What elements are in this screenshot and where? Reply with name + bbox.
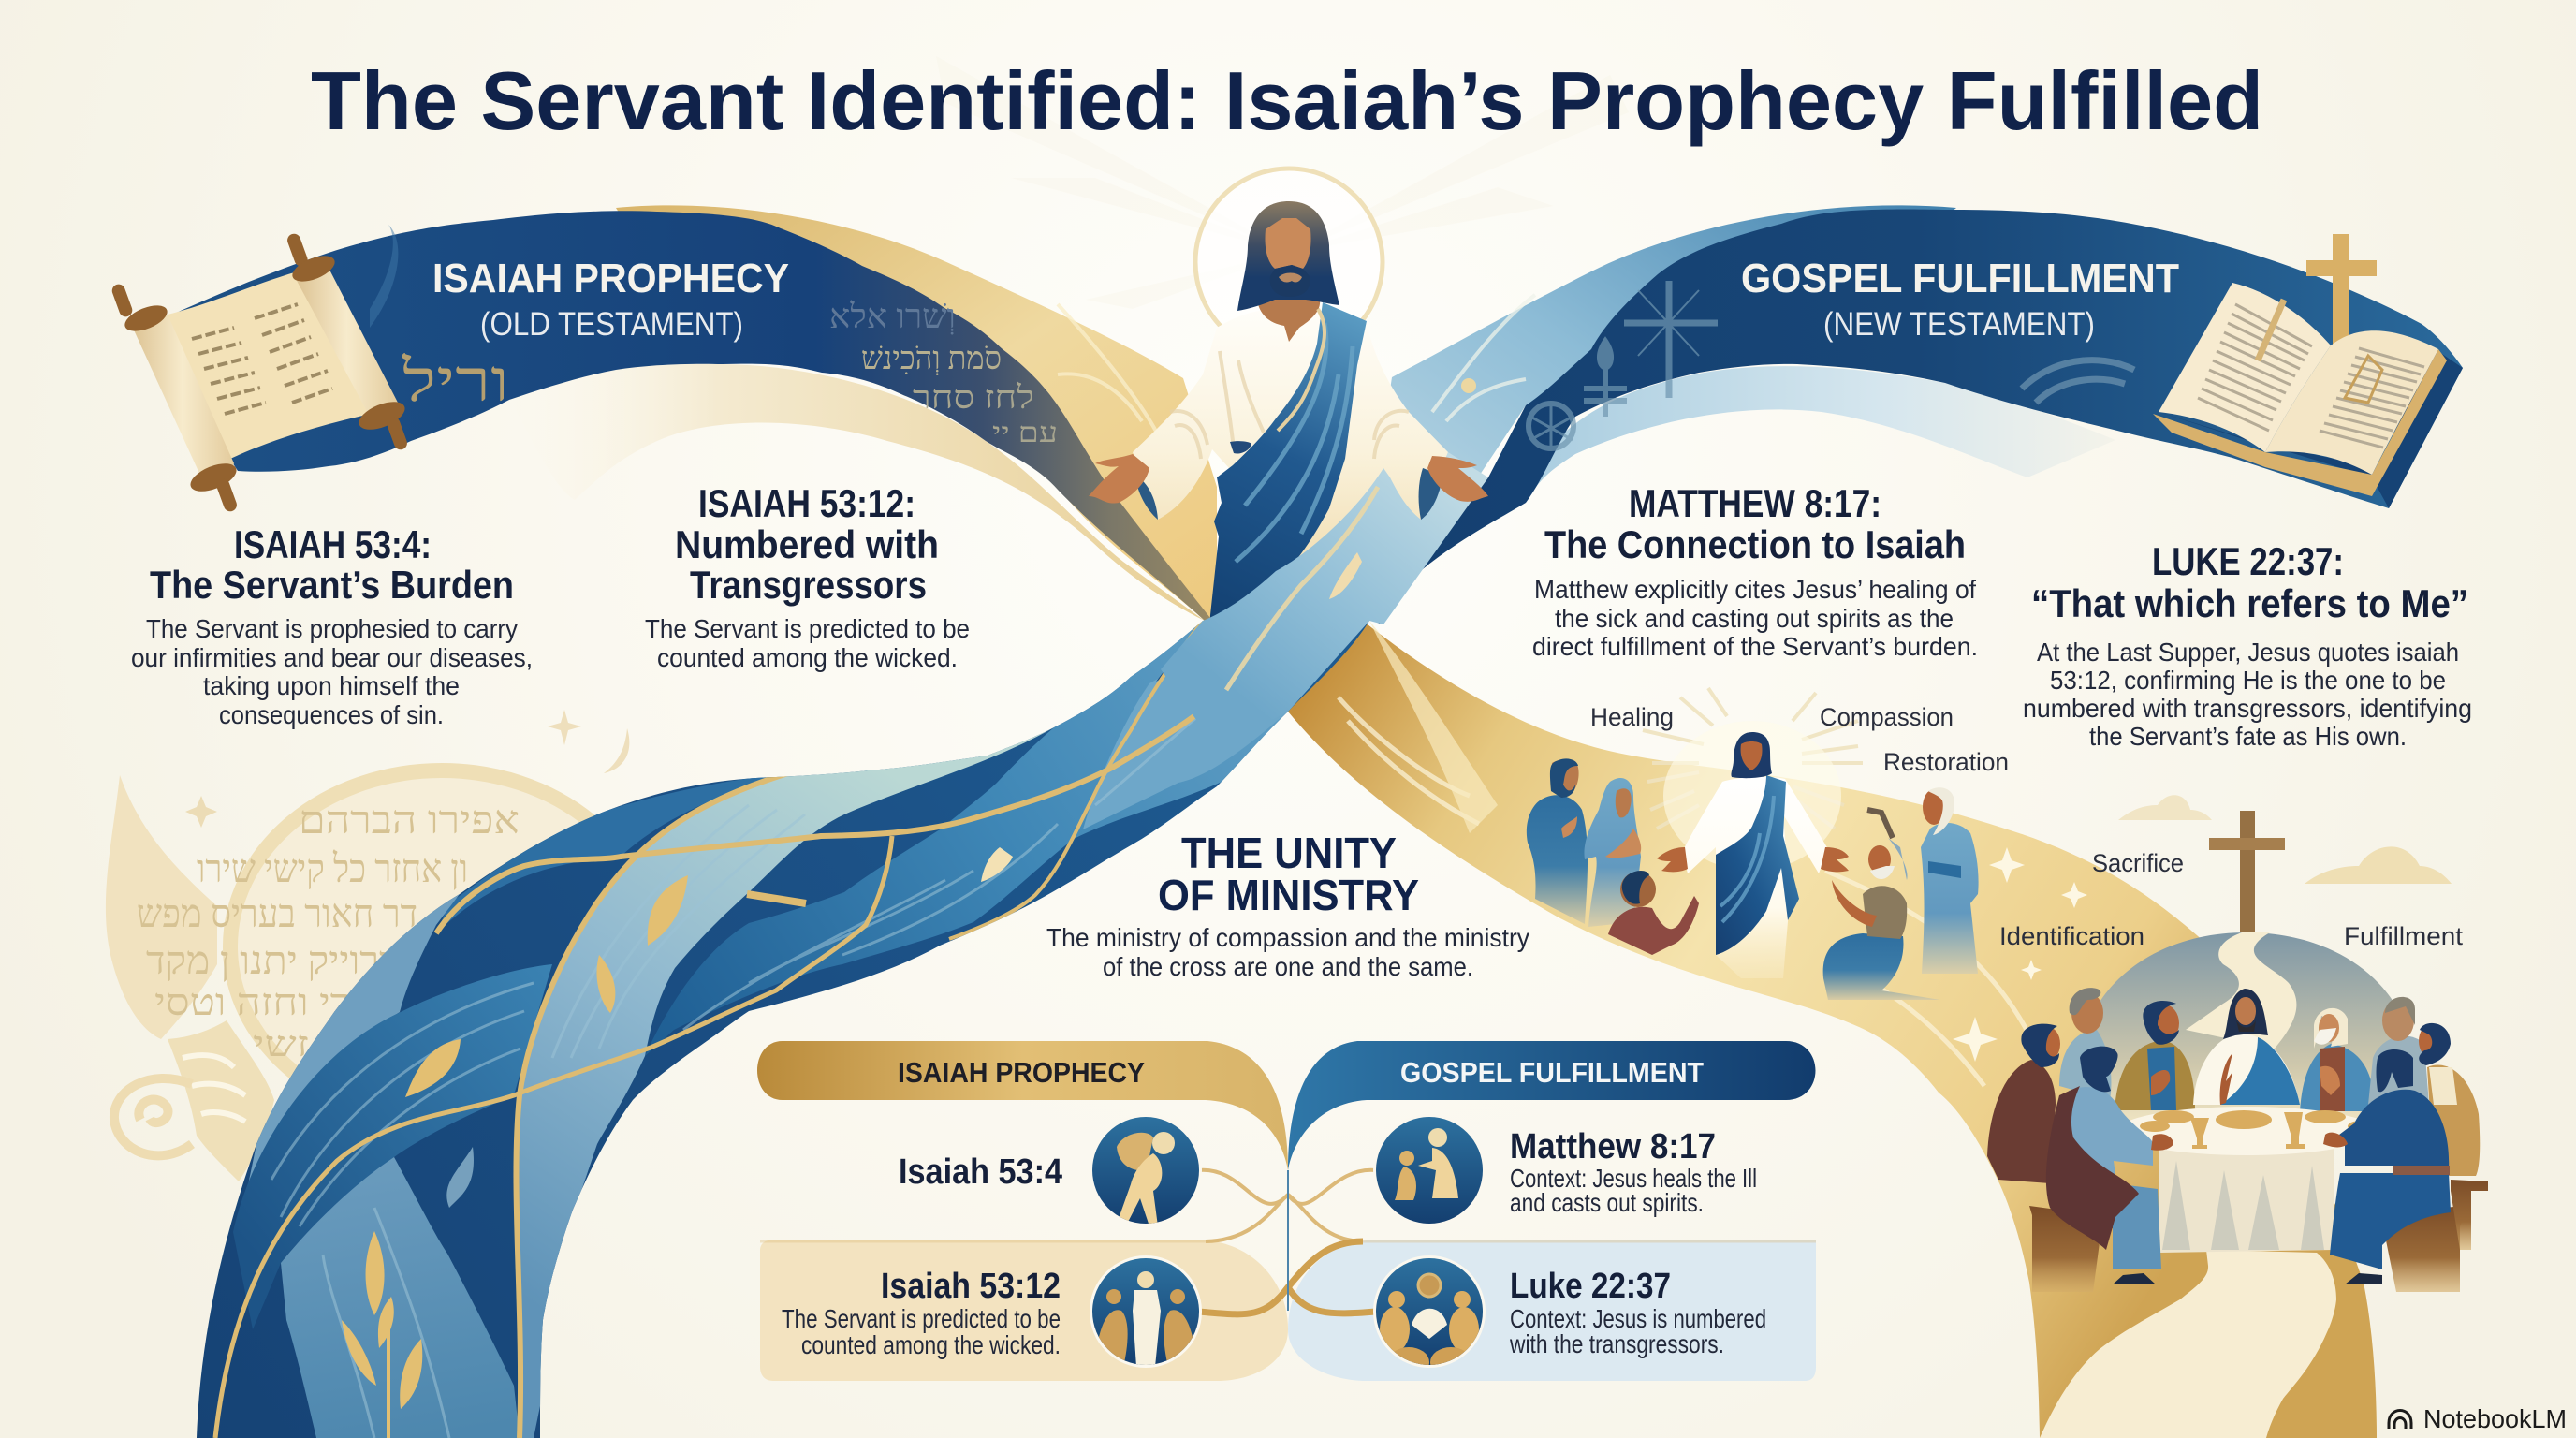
head	[1731, 732, 1772, 778]
text block: Isaiah 53:4	[131, 522, 533, 729]
ribbon heading	[432, 256, 789, 343]
connectors	[760, 1170, 1816, 1314]
labels around healing scene: Compassion	[1820, 703, 1954, 731]
hill	[2097, 932, 2396, 1123]
text block: Isaiah 53:12: Transgressors	[690, 563, 927, 607]
swirl	[114, 1078, 192, 1155]
icon: cross on hill	[2209, 811, 2285, 932]
text block: Isaiah 53:12: Numbered with	[675, 522, 939, 566]
icon: burdened servant	[1092, 1117, 1202, 1224]
text block: Luke 22:37: LUKE 22:37:	[2152, 539, 2344, 583]
strand: pale with leaves	[516, 727, 1054, 1438]
belt	[1230, 441, 1251, 454]
header: Isaiah Prophecy: ISAIAH PROPHECY	[898, 1056, 1145, 1089]
panel: Gospel fulfillment ribbon	[1369, 205, 2463, 624]
strand: top blue	[442, 777, 771, 924]
halo	[1195, 169, 1383, 356]
emblem: faded Hebrew scroll watermark: זשי	[253, 1025, 309, 1064]
Hebrew on ribbon: וְשׁרו אלא	[829, 298, 956, 335]
left hand	[1089, 454, 1149, 504]
watermark: NotebookLM: NotebookLM	[2423, 1404, 2567, 1433]
light rays behind the central figure	[936, 56, 1629, 309]
text block: Isaiah 53:4: consequences of sin.	[219, 700, 444, 729]
icon: last supper	[1373, 1255, 1486, 1377]
text block: The Unity of Ministry: OF MINISTRY	[1158, 871, 1419, 919]
panel: gold fulfillment ribbon	[1288, 609, 2377, 1438]
row: Matthew 8:17: and casts out spirits.	[1510, 1188, 1704, 1217]
table	[2159, 1133, 2334, 1253]
text block: Isaiah 53:12: ISAIAH 53:12:	[698, 481, 915, 525]
ribbon heading	[1741, 256, 2179, 343]
row: Isaiah 53:12: Isaiah 53:12	[881, 1267, 1061, 1306]
icon: Torah scroll	[110, 232, 409, 513]
neck	[1257, 300, 1320, 342]
kneeling man	[1823, 933, 1940, 1000]
text block: Isaiah 53:12	[645, 481, 970, 672]
panel: Isaiah prophecy ribbon	[164, 205, 1217, 627]
text block: Matthew 8:17	[1532, 481, 1978, 661]
row: Luke 22:37: Luke 22:37	[1510, 1267, 1671, 1306]
text block: Matthew 8:17: The Connection to Isaiah	[1544, 522, 1966, 566]
strand: lower mid blue	[233, 964, 552, 1329]
feather base	[168, 1020, 274, 1181]
row: Matthew 8:17: Matthew 8:17	[1510, 1127, 1716, 1167]
text block: Isaiah 53:4: taking upon himself the	[203, 671, 460, 700]
child	[1608, 896, 1699, 955]
lower light ribbon in front of the sash	[1161, 452, 1488, 749]
text block: Luke 22:37	[2023, 539, 2472, 751]
text block: Matthew 8:17: Matthew explicitly cites Jesus’ healing of	[1534, 575, 1976, 604]
text block: Matthew 8:17: the sick and casting out spirits as the	[1555, 604, 1954, 633]
radiance	[1643, 688, 1863, 829]
sleeve openings	[1135, 475, 1158, 520]
left side disciple	[1987, 1060, 2056, 1183]
Hebrew on ribbon: סֹמת וְהֹכִינשׁ	[861, 342, 1002, 376]
row: Matthew 8:17: Context: Jesus heals the Ill	[1510, 1164, 1757, 1193]
text block: Isaiah 53:12: The Servant is predicted to be	[645, 614, 970, 643]
row: Isaiah 53:12: The Servant is predicted to be	[782, 1304, 1061, 1333]
row: Luke 22:37: with the transgressors.	[1509, 1329, 1724, 1358]
emblem: faded Hebrew scroll watermark: רי וחזה וטסי	[154, 981, 351, 1023]
icon: gold cross above book	[2306, 234, 2377, 346]
road	[2186, 932, 2296, 1049]
emblem: faded Hebrew scroll watermark: ון אחזר כל קישי שירו	[197, 848, 468, 891]
labels around healing scene	[1590, 703, 2009, 776]
hands	[1657, 847, 1688, 872]
text block: Matthew 8:17: direct fulfillment of the Servant’s burden.	[1532, 632, 1978, 661]
labels around Last Supper scene: Identification	[1999, 922, 2144, 950]
text block: Isaiah 53:4: The Servant is prophesied to carry	[146, 614, 518, 643]
text block: Matthew 8:17: MATTHEW 8:17:	[1629, 481, 1881, 525]
header: Gospel Fulfillment: GOSPEL FULFILLMENT	[1400, 1056, 1704, 1089]
text block: Luke 22:37: 53:12, confirming He is the one to be	[2050, 666, 2446, 695]
row: Matthew 8:17	[1510, 1127, 1757, 1217]
woman	[1584, 778, 1641, 927]
benches	[2029, 1206, 2113, 1292]
beard	[1270, 265, 1310, 297]
text block: Isaiah 53:4: ISAIAH 53:4:	[234, 522, 432, 566]
emblem: faded Hebrew scroll watermark: ורוייק יתנו ן מקד	[146, 940, 389, 983]
row: Luke 22:37	[1509, 1267, 1766, 1358]
row: Luke 22:37: Context: Jesus is numbered	[1510, 1304, 1766, 1333]
emblem: faded Hebrew scroll watermark: אפירו הברהם	[299, 800, 520, 843]
text block: Isaiah 53:4: our infirmities and bear our diseases,	[131, 643, 533, 672]
Hebrew on ribbon	[402, 298, 1058, 448]
labels around Last Supper scene	[1999, 849, 2464, 950]
text block: Isaiah 53:12: counted among the wicked.	[657, 643, 958, 672]
far right disciple	[2427, 1064, 2480, 1176]
gold leaves	[342, 847, 1013, 1438]
back row disciples	[2059, 988, 2480, 1176]
Hebrew on ribbon: וריל	[402, 350, 509, 414]
small decorative sparkles, left	[548, 710, 629, 773]
title: The Servant Identified: Isaiah’s Prophecy Fulfilled	[311, 54, 2263, 147]
row background: Isaiah 53:12	[760, 1240, 1288, 1381]
panel: comparison table	[757, 1041, 1816, 1381]
healing Jesus sash	[1716, 775, 1799, 955]
illustration: Last Supper scene	[1987, 932, 2488, 1292]
icon: healing	[1373, 1114, 1486, 1226]
text block: Luke 22:37: At the Last Supper, Jesus quotes isaiah	[2037, 638, 2459, 667]
row background: Luke 22:37	[1288, 1240, 1816, 1381]
illustration: healing scene	[1527, 688, 1979, 1000]
man	[1527, 795, 1588, 924]
strand: left pale	[249, 894, 460, 1181]
text block: The Unity of Ministry: THE UNITY	[1181, 829, 1397, 877]
ribbon icons	[1529, 281, 2134, 449]
text block: Luke 22:37: the Servant’s fate as His own.	[2089, 722, 2407, 751]
blue sash	[1208, 302, 1367, 655]
right hand	[1427, 456, 1488, 502]
text block: Isaiah 53:4: The Servant’s Burden	[150, 563, 514, 607]
ribbon heading: GOSPEL FULFILLMENT	[1741, 256, 2179, 301]
icon: open Bible	[2153, 283, 2463, 508]
healing Jesus robe	[1682, 777, 1828, 978]
text block: The Unity of Ministry	[1046, 829, 1530, 981]
lighter band near crossing	[1083, 622, 1368, 829]
main centre band	[646, 622, 1288, 1056]
row: Isaiah 53:12: counted among the wicked.	[801, 1330, 1061, 1359]
sparkles and clouds	[1953, 795, 2452, 1062]
chart: intertwined blue ribbon	[187, 571, 1404, 1438]
text block: The Unity of Ministry: of the cross are one and the same.	[1103, 952, 1473, 981]
labels around healing scene: Restoration	[1883, 748, 2009, 776]
robe folds	[1170, 351, 1409, 459]
emblem: faded Hebrew scroll watermark: דר חאור בעריס מפש	[137, 893, 417, 936]
path to the supper table	[2040, 1250, 2336, 1438]
Hebrew on ribbon: לחז סחר	[913, 381, 1034, 416]
elder	[1921, 823, 1979, 974]
ribbon heading: (NEW TESTAMENT)	[1823, 306, 2095, 343]
row: Isaiah 53:12	[782, 1267, 1061, 1359]
face	[1265, 218, 1311, 269]
ribbon heading: (OLD TESTAMENT)	[480, 306, 743, 343]
robe	[1133, 304, 1448, 599]
front right disciple	[2330, 1173, 2451, 1269]
front left disciple	[2113, 1183, 2161, 1269]
labels around Last Supper scene: Fulfillment	[2344, 922, 2464, 950]
text block: The Unity of Ministry: The ministry of compassion and the ministry	[1046, 923, 1530, 952]
text block: Luke 22:37: numbered with transgressors, identifying	[2023, 694, 2472, 723]
strand: bottom pale	[281, 1157, 520, 1438]
ribbon heading: ISAIAH PROPHECY	[432, 256, 789, 301]
central Jesus at table	[2193, 1034, 2300, 1105]
Hebrew on ribbon: עם יי	[992, 418, 1058, 448]
header: Isaiah Prophecy	[757, 1041, 1288, 1170]
header: Gospel Fulfillment	[1288, 1041, 1816, 1170]
emblem: faded Hebrew scroll watermark	[106, 770, 653, 1181]
text block: Luke 22:37: “That which refers to Me”	[2031, 581, 2468, 625]
figure: central Jesus	[1089, 169, 1488, 749]
icon: numbered with transgressors	[1090, 1255, 1202, 1368]
labels around Last Supper scene: Sacrifice	[2092, 849, 2184, 877]
hair	[1237, 201, 1339, 311]
row: Isaiah 53:4: Isaiah 53:4	[899, 1152, 1062, 1192]
labels around healing scene: Healing	[1590, 703, 1674, 731]
